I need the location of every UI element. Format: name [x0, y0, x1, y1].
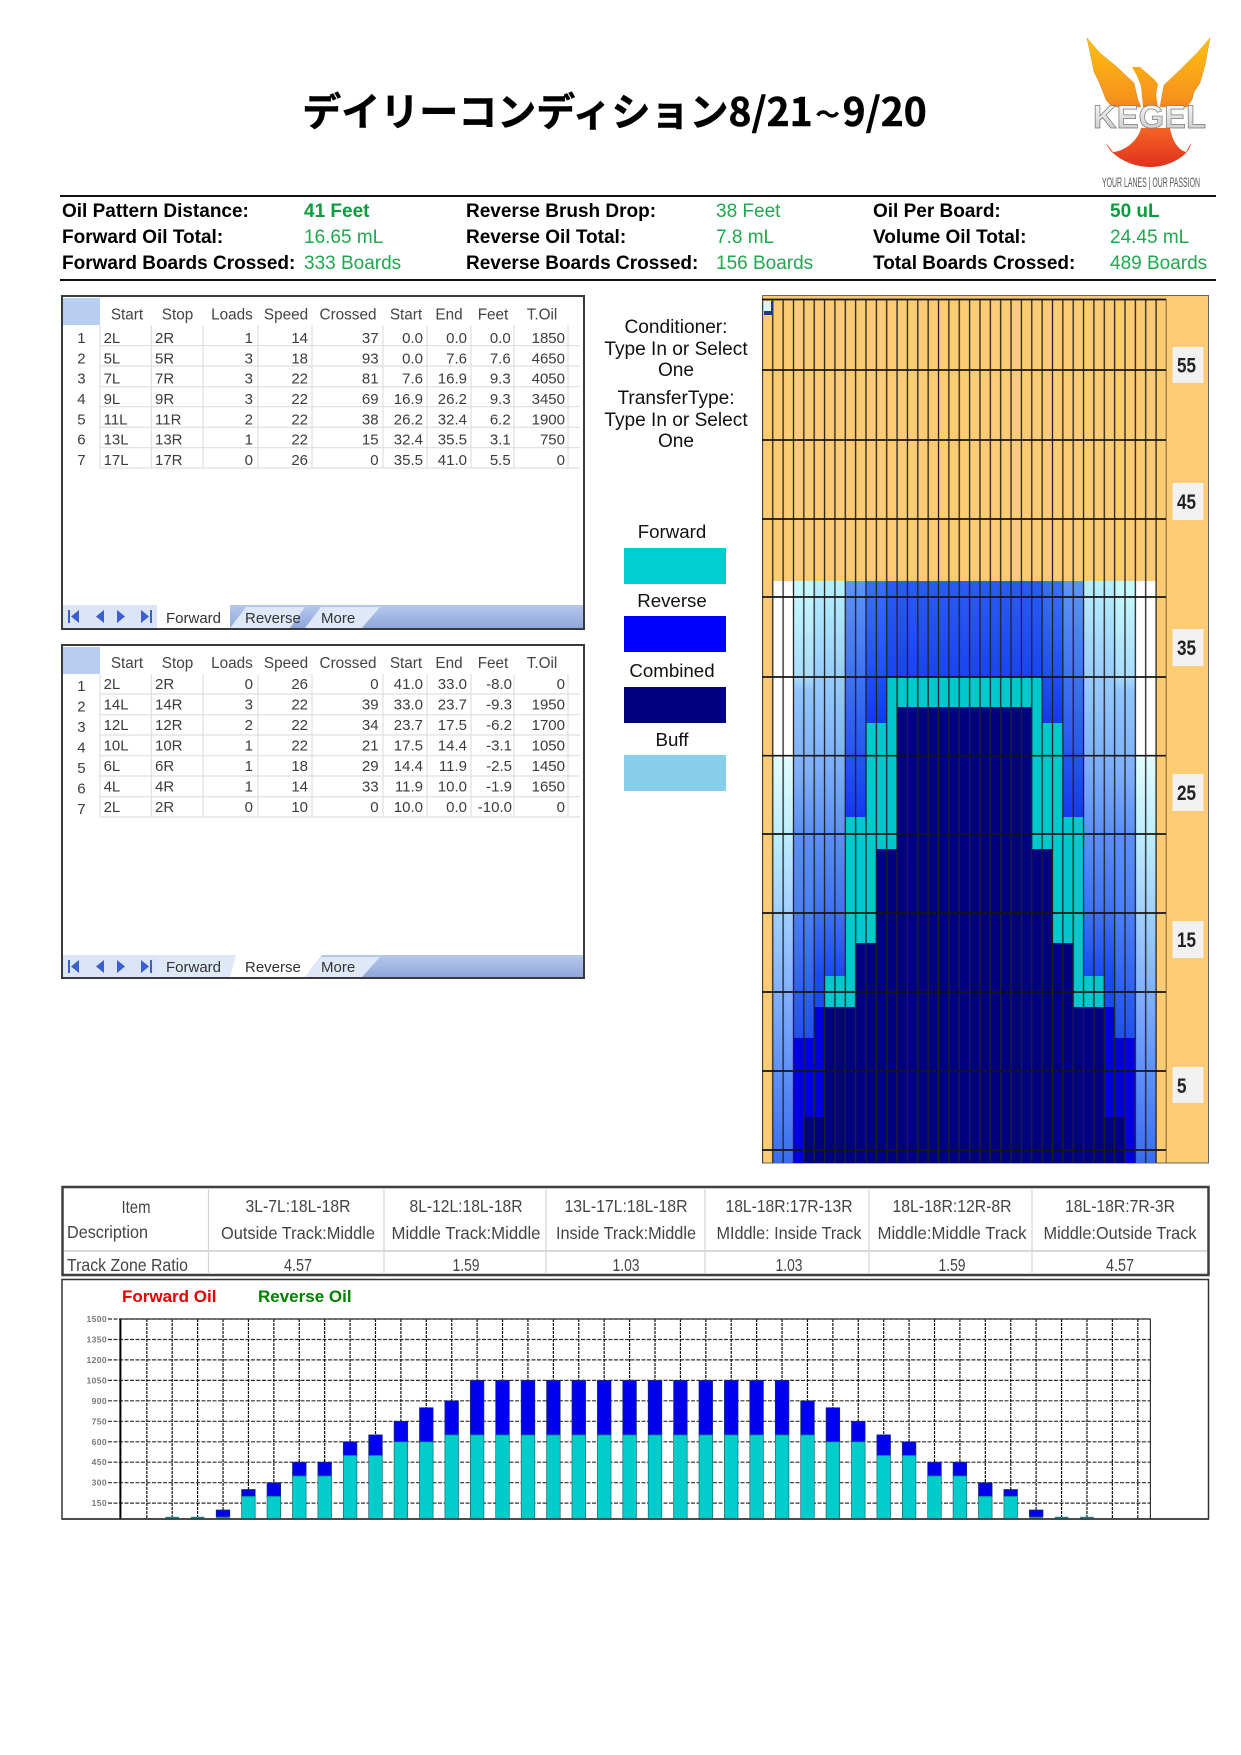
data rows: 18: [291, 758, 308, 775]
logo: Kegel phoenix: [1087, 38, 1210, 190]
data rows: [77, 676, 565, 818]
sheet tab bar: More: [321, 959, 355, 976]
data rows: 39: [362, 696, 379, 714]
y axis labels: 1500: [86, 1314, 107, 1324]
row labels: Item: [122, 1197, 150, 1217]
column: inside right: 1.03: [776, 1255, 803, 1275]
data rows: 22: [291, 696, 308, 714]
panel: forward table: [62, 296, 584, 629]
data rows: 5: [77, 760, 86, 777]
data rows: 17R: [155, 452, 183, 469]
data rows: 1: [77, 330, 86, 347]
column: outside right: [1044, 1196, 1197, 1275]
column: inside left: [556, 1196, 696, 1275]
header rule bottom: [60, 279, 1216, 281]
data rows: 2L: [104, 676, 120, 693]
column headers: End: [435, 306, 463, 324]
data rows: 16.9: [438, 371, 467, 388]
panel: oil per board bar chart: [62, 1280, 1208, 1519]
column headers: Speed: [264, 306, 308, 324]
column: middle left: Middle Track:Middle: [392, 1223, 541, 1243]
data rows: 2R: [155, 676, 174, 693]
data rows: 5L: [104, 350, 120, 367]
data rows: 35.5: [438, 432, 467, 449]
data rows: 22: [291, 391, 308, 408]
combined oil core: [804, 707, 1125, 1163]
column headers: Start: [390, 655, 423, 672]
sheet tab bar: Forward: [166, 959, 221, 976]
y axis labels: 150: [92, 1498, 107, 1508]
distance marker 35: 35: [1177, 637, 1196, 660]
distance marker 25: [1172, 774, 1204, 811]
data rows: -8.0: [486, 676, 512, 693]
column headers: Feet: [478, 306, 509, 324]
data rows: 14R: [155, 696, 183, 714]
column: inside right: 18L-18R:17R-13R: [726, 1196, 852, 1216]
data rows: 5: [77, 411, 86, 428]
data rows: 69: [362, 391, 379, 408]
data rows: 13R: [155, 432, 183, 449]
data rows: 11.9: [439, 758, 467, 775]
column: inside left: 13L-17L:18L-18R: [564, 1196, 688, 1216]
distance marker 35: [1172, 629, 1204, 666]
chart legend: forward oil: Forward Oil: [122, 1287, 216, 1306]
column headers: T.Oil: [527, 306, 557, 324]
data rows: 4: [77, 391, 86, 408]
conditioner note: Conditioner:: [625, 317, 727, 338]
data rows: 26: [291, 676, 308, 693]
distance marker 45: [1172, 483, 1204, 520]
distance marker 15: 15: [1177, 929, 1196, 952]
data rows: 7.6: [402, 371, 423, 388]
data rows: 16.9: [394, 391, 423, 408]
legend: Buff: [656, 729, 689, 750]
data rows: 6: [77, 780, 86, 798]
data rows: 2: [77, 350, 86, 367]
pattern summary block: 50 uL: [1110, 201, 1160, 222]
conditioner note: Type In or Select: [604, 339, 748, 360]
distance marker 5: 5: [1177, 1075, 1187, 1098]
sheet tab bar: Reverse: [245, 610, 301, 627]
y axis labels: 450: [92, 1457, 107, 1467]
data rows: 1: [245, 738, 253, 754]
column: outside left: [221, 1196, 375, 1275]
pattern summary block: 156 Boards: [716, 253, 813, 274]
pattern summary block: Oil Per Board:: [873, 201, 1001, 222]
reverse oil gradient columns: [773, 581, 1156, 1163]
data rows: 93: [362, 350, 379, 367]
data rows: 7L: [104, 371, 120, 388]
data rows: 12L: [104, 717, 129, 734]
data rows: 33.0: [394, 696, 423, 714]
data rows: -6.2: [486, 717, 512, 734]
pattern summary block: Reverse Brush Drop:: [466, 201, 656, 222]
data rows: 0.0: [446, 799, 467, 816]
data rows: 0: [370, 676, 379, 693]
column headers: T.Oil: [527, 655, 557, 672]
data rows: 0: [245, 799, 253, 816]
pattern summary block: 489 Boards: [1110, 253, 1207, 274]
data rows: 9.3: [490, 391, 511, 408]
column: inside right: [716, 1196, 862, 1275]
data rows: 11.9: [395, 778, 423, 796]
data rows: 4: [77, 740, 86, 756]
column: middle left: 1.59: [452, 1255, 480, 1275]
data rows: 10L: [104, 738, 129, 754]
data rows: -9.3: [486, 696, 512, 714]
data rows: 3: [77, 719, 86, 736]
data rows: 22: [291, 371, 308, 388]
y axis labels: 300: [92, 1478, 107, 1488]
data rows: 4650: [532, 350, 565, 367]
board lines: [762, 299, 1166, 1163]
y axis labels: 600: [92, 1437, 107, 1447]
data rows: 0: [557, 799, 565, 816]
legend: [624, 521, 726, 791]
data rows: 1900: [532, 411, 565, 428]
pattern summary block: Oil Pattern Distance:: [62, 201, 249, 222]
data rows: 33.0: [438, 676, 467, 693]
data rows: 4R: [155, 778, 174, 796]
data rows: 6: [77, 432, 86, 449]
y axis labels: 1050: [86, 1375, 107, 1385]
data rows: 1: [77, 678, 86, 695]
data rows: 26.2: [438, 391, 467, 408]
short edge bars: [165, 1517, 1094, 1519]
distance marker 15: [1172, 921, 1204, 958]
data rows: 38: [362, 411, 379, 428]
data rows: 1450: [532, 758, 565, 775]
data rows: 4L: [104, 778, 120, 796]
transfer type note: TransferType:: [617, 388, 735, 409]
transfer type note: Type In or Select: [604, 410, 748, 431]
column: outside left: Outside Track:Middle: [221, 1223, 375, 1243]
data rows: 0: [245, 676, 253, 693]
pattern summary block: [62, 201, 1207, 274]
data rows: 32.4: [438, 411, 467, 428]
column: inside right: MIddle: Inside Track: [716, 1223, 862, 1243]
data rows: 7R: [155, 371, 174, 388]
data rows: 17L: [104, 452, 129, 469]
data rows: 15: [362, 432, 379, 449]
data rows: 1: [245, 778, 253, 796]
data rows: 4050: [532, 371, 565, 388]
column headers: [111, 306, 557, 324]
data rows: 7.6: [490, 350, 511, 367]
distance marker 5: [1172, 1067, 1204, 1103]
distance marker 55: [1172, 347, 1204, 383]
data rows: 0.0: [446, 330, 467, 347]
data rows: 0: [370, 452, 379, 469]
data rows: 17.5: [394, 738, 423, 754]
data rows: 3: [245, 350, 253, 367]
reverse oil bars: [216, 1380, 1043, 1517]
column: outside left: 4.57: [284, 1255, 312, 1275]
data rows: 2L: [104, 330, 120, 347]
data rows: 1: [245, 758, 253, 775]
data rows: 0.0: [402, 350, 423, 367]
data rows: 22: [291, 717, 308, 734]
data rows: 9R: [155, 391, 174, 408]
transfer type note: One: [658, 431, 694, 452]
data rows: 3: [245, 371, 253, 388]
data rows: 14L: [104, 696, 129, 714]
column: middle left: [392, 1196, 541, 1275]
data rows: 34: [362, 717, 379, 734]
data rows: 6.2: [490, 411, 511, 428]
data rows: 13L: [104, 432, 129, 449]
column: inside left: 1.03: [612, 1255, 640, 1275]
chart legend: reverse oil: Reverse Oil: [258, 1287, 352, 1306]
column headers: [111, 655, 557, 672]
sheet tab bar: [63, 605, 583, 628]
logo wordmark: KEGEL: [1093, 99, 1206, 135]
data rows: 3: [245, 696, 253, 714]
data rows: 2: [245, 717, 253, 734]
data rows: 7: [77, 801, 86, 818]
data rows: 0.0: [402, 330, 423, 347]
column: inside left: Inside Track:Middle: [556, 1223, 696, 1243]
data rows: 10.0: [438, 778, 467, 796]
data rows: 2: [245, 411, 253, 428]
column headers: Start: [390, 306, 423, 324]
data rows: 0: [557, 676, 565, 693]
data rows: 35.5: [394, 452, 423, 469]
data rows: 2R: [155, 799, 174, 816]
data rows: 10.0: [394, 799, 423, 816]
title: ～: [816, 95, 840, 130]
data rows: 1850: [532, 330, 565, 347]
data rows: 0.0: [490, 330, 511, 347]
column: outside right: Middle:Outside Track: [1044, 1223, 1197, 1243]
header rule top: [60, 195, 1216, 197]
data rows: 22: [291, 432, 308, 449]
sheet tab bar: Reverse: [245, 959, 301, 976]
column: middle right: 1.59: [938, 1255, 966, 1275]
data rows: 26.2: [394, 411, 423, 428]
transfer type note: [604, 388, 748, 452]
pattern summary block: Forward Boards Crossed:: [62, 253, 295, 274]
data rows: 2L: [104, 799, 120, 816]
data rows: 1050: [532, 738, 565, 754]
column: middle left: 8L-12L:18L-18R: [410, 1196, 522, 1216]
data rows: 12R: [155, 717, 183, 734]
column: middle right: 18L-18R:12R-8R: [892, 1196, 1012, 1216]
corner cell: [63, 647, 100, 674]
column: outside right: 4.57: [1106, 1255, 1134, 1275]
data rows: 3: [245, 391, 253, 408]
data rows: 29: [362, 758, 379, 775]
column headers: Crossed: [320, 655, 376, 672]
pattern summary block: 7.8 mL: [716, 227, 774, 248]
data rows: -1.9: [486, 778, 512, 796]
sheet tab bar: More: [321, 610, 355, 627]
column: outside right: 18L-18R:7R-3R: [1065, 1196, 1175, 1216]
column headers: Start: [111, 655, 144, 672]
forward oil band: [825, 677, 1104, 1007]
data rows: 750: [540, 432, 565, 449]
column headers: Loads: [211, 306, 253, 324]
sheet tab bar: Forward: [166, 610, 221, 627]
column headers: Loads: [211, 655, 253, 672]
data rows: 6L: [104, 758, 120, 775]
column headers: Stop: [162, 306, 193, 324]
distance marker 55: 55: [1177, 354, 1196, 378]
data rows: 1: [245, 330, 253, 347]
data rows: 0: [557, 452, 565, 469]
legend: Forward: [638, 521, 706, 542]
title: デイリーコンディション8/21: [302, 82, 813, 138]
data rows: 0: [245, 452, 253, 469]
title: 9/20: [843, 82, 927, 138]
column headers: Start: [111, 306, 144, 324]
data rows: 9L: [104, 391, 120, 408]
data rows: 26: [291, 452, 308, 469]
data rows: 22: [291, 738, 308, 754]
conditioner note: [604, 317, 748, 381]
data rows: 3.1: [490, 432, 511, 449]
data rows: 10: [291, 799, 308, 816]
y axis labels: [86, 1314, 107, 1508]
column headers: Feet: [478, 655, 509, 672]
data rows: 17.5: [438, 717, 467, 734]
data rows: 1: [245, 432, 253, 449]
conditioner note: One: [658, 360, 694, 381]
data rows: 41.0: [438, 452, 467, 469]
column headers: Stop: [162, 655, 193, 672]
data rows: 1950: [532, 696, 565, 714]
data rows: 6R: [155, 758, 174, 775]
data rows: 11R: [155, 411, 182, 428]
data rows: 37: [362, 330, 379, 347]
data rows: 81: [362, 371, 379, 388]
data rows: -3.1: [486, 738, 512, 754]
panel: lane oil graph: [762, 296, 1208, 1163]
data rows: 14: [291, 778, 308, 796]
data rows: 14.4: [394, 758, 423, 775]
pattern summary block: Reverse Oil Total:: [466, 227, 626, 248]
pattern summary block: 24.45 mL: [1110, 227, 1189, 248]
pattern summary block: Forward Oil Total:: [62, 227, 223, 248]
data rows: 18: [291, 350, 308, 367]
pattern summary block: 16.65 mL: [304, 227, 383, 248]
sheet tab bar: [63, 955, 583, 977]
data rows: 22: [291, 411, 308, 428]
y axis labels: 1350: [86, 1334, 107, 1344]
row labels: [67, 1197, 188, 1275]
data rows: 1700: [532, 717, 565, 734]
data rows: 14.4: [438, 738, 467, 754]
data rows: 3450: [532, 391, 565, 408]
data rows: 3: [77, 371, 86, 388]
column headers: End: [435, 655, 463, 672]
data rows: -10.0: [478, 799, 512, 816]
data rows: 0: [370, 799, 379, 816]
distance marker 25: 25: [1177, 782, 1196, 805]
data rows: 7.6: [446, 350, 467, 367]
y axis labels: 1200: [86, 1355, 107, 1365]
y axis labels: 750: [92, 1416, 107, 1426]
data rows: 14: [291, 330, 308, 347]
data rows: 2R: [155, 330, 174, 347]
column headers: Speed: [264, 655, 308, 672]
panel: reverse table: [62, 645, 584, 978]
data rows: 1650: [532, 778, 565, 796]
data rows: 41.0: [394, 676, 423, 693]
data rows: 7: [77, 452, 86, 469]
lane marker: [764, 301, 773, 315]
data rows: 5R: [155, 350, 174, 367]
pattern summary block: 41 Feet: [304, 201, 370, 222]
data rows: 11L: [104, 411, 128, 428]
forward oil bars: [242, 1435, 1018, 1519]
data rows: 23.7: [438, 696, 467, 714]
distance marker 45: 45: [1177, 491, 1196, 514]
pattern summary block: 333 Boards: [304, 253, 401, 274]
data rows: 10R: [155, 738, 183, 754]
legend: Combined: [629, 660, 715, 681]
column: outside left: 3L-7L:18L-18R: [246, 1196, 350, 1216]
row labels: Description: [67, 1222, 148, 1242]
data rows: 32.4: [394, 432, 423, 449]
corner cell: [63, 298, 100, 325]
pattern summary block: Reverse Boards Crossed:: [466, 253, 698, 274]
pattern summary block: Volume Oil Total:: [873, 227, 1026, 248]
data rows: 21: [362, 738, 379, 754]
data rows: [77, 330, 565, 469]
pattern summary block: Total Boards Crossed:: [873, 253, 1075, 274]
data rows: -2.5: [486, 758, 512, 775]
data rows: 5.5: [490, 452, 511, 469]
pattern summary block: 38 Feet: [716, 201, 781, 222]
legend: Reverse: [637, 590, 707, 611]
data rows: 33: [362, 778, 379, 796]
row labels: Track Zone Ratio: [67, 1255, 188, 1275]
data rows: 2: [77, 698, 86, 716]
column: middle right: [878, 1196, 1027, 1275]
column headers: Crossed: [320, 306, 376, 324]
strong reverse oil: [793, 1007, 1135, 1163]
data rows: 9.3: [490, 371, 511, 388]
panel: track zone ratio table: [62, 1187, 1208, 1275]
y axis labels: 900: [92, 1396, 107, 1406]
data rows: 23.7: [394, 717, 423, 734]
column: middle right: Middle:Middle Track: [878, 1223, 1027, 1243]
